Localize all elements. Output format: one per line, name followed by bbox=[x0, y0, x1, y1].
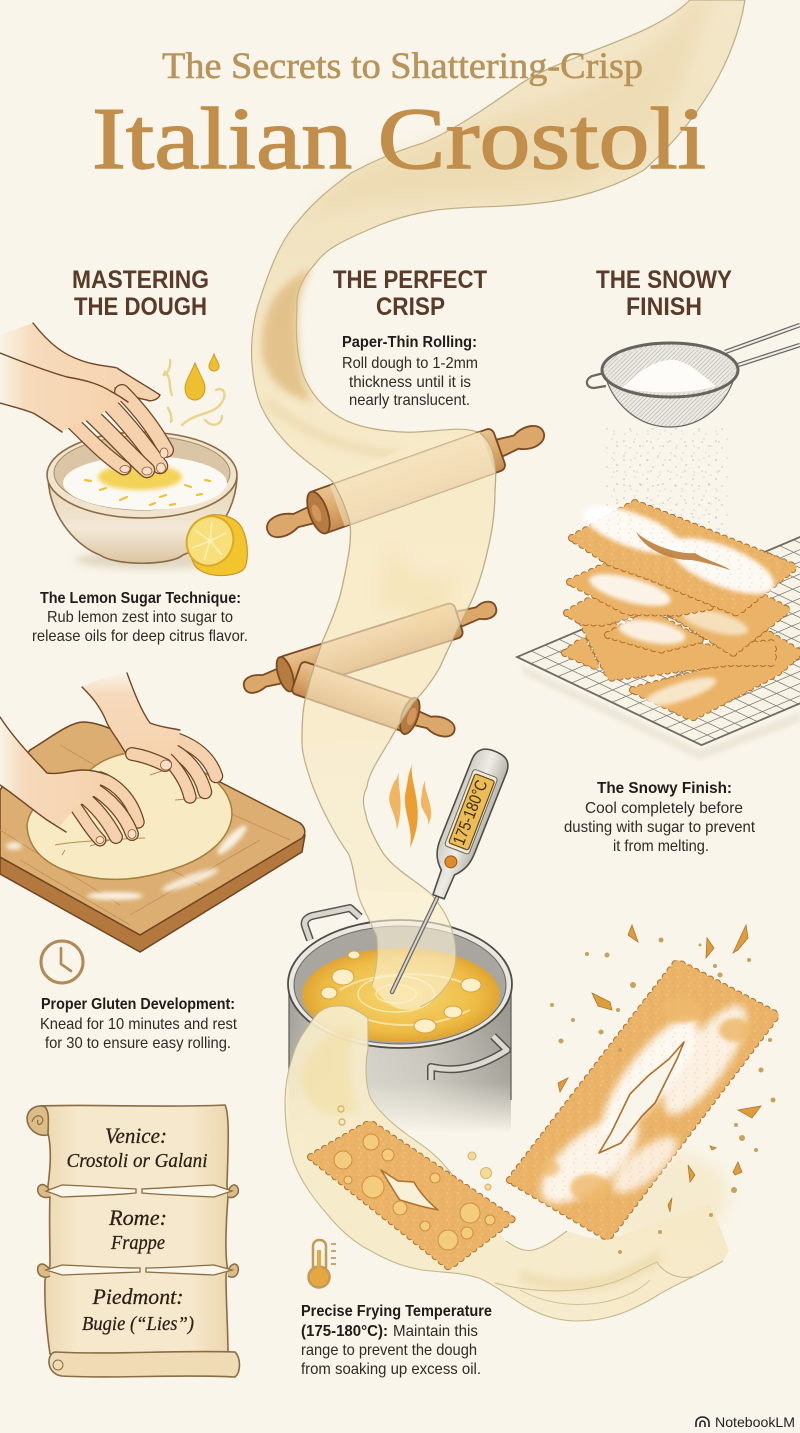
text: frying temperature: from soaking up excess oil. bbox=[301, 1361, 481, 1378]
text: gluten development: Proper Gluten Development: bbox=[41, 996, 235, 1013]
dough bbox=[27, 752, 232, 879]
text: gluten development bbox=[40, 996, 238, 1052]
sifted sugar falling bbox=[604, 428, 728, 548]
board top bbox=[0, 722, 305, 935]
handle bbox=[725, 325, 800, 366]
heading: mastering the dough bbox=[72, 266, 209, 321]
lemon oil drops and swirls bbox=[164, 354, 224, 425]
crumbs around crostolo bbox=[550, 925, 776, 1254]
scroll fold: upper bbox=[38, 1185, 238, 1198]
heading: the perfect crisp bbox=[333, 266, 487, 321]
hook bbox=[587, 373, 606, 388]
text: paper-thin rolling bbox=[342, 334, 478, 409]
text: snowy finish: The Snowy Finish: bbox=[597, 780, 732, 797]
crostolo with oil bubbles bbox=[311, 1123, 512, 1267]
rolling pin: lower back bbox=[239, 590, 501, 704]
heading: the perfect crisp: CRISP bbox=[376, 293, 445, 321]
sugar bbox=[63, 456, 227, 510]
heading: the snowy finish: THE SNOWY bbox=[596, 266, 732, 294]
text: frying temperature: Precise Frying Temperature bbox=[301, 1303, 492, 1320]
cooling rack bbox=[517, 528, 800, 745]
Rome label: Rome: bbox=[108, 1205, 167, 1230]
text: lemon sugar technique bbox=[32, 590, 248, 645]
probe bbox=[392, 898, 437, 992]
heading: the snowy finish bbox=[596, 266, 732, 321]
scroll fold: lower bbox=[38, 1264, 238, 1277]
text: lemon sugar technique: release oils for deep citrus flavor. bbox=[32, 628, 248, 645]
text: paper-thin rolling: Roll dough to 1-2mm bbox=[342, 355, 478, 372]
text: snowy finish: it from melting. bbox=[613, 838, 709, 855]
crostolo dusted with sugar bbox=[510, 962, 777, 1238]
hot oil bbox=[302, 948, 500, 1042]
bottom roll bbox=[49, 1352, 239, 1377]
lemon zest bbox=[85, 464, 210, 505]
bowl shadow bbox=[75, 551, 225, 569]
bowl bbox=[48, 478, 237, 563]
heading: the perfect crisp: THE PERFECT bbox=[333, 266, 487, 294]
text: gluten development: Knead for 10 minutes and rest bbox=[40, 1016, 238, 1033]
sugar mound bbox=[622, 360, 716, 392]
text: lemon sugar technique: The Lemon Sugar Technique: bbox=[40, 590, 241, 607]
heading: mastering the dough: MASTERING bbox=[72, 266, 209, 294]
icon: clock bbox=[41, 941, 83, 983]
flowing dough ribbon: upper bbox=[252, 0, 745, 990]
heat wisps bbox=[389, 764, 431, 848]
rolling pin: lower front bbox=[290, 659, 460, 749]
oil swirls and bubbles bbox=[321, 951, 481, 1033]
sieve bbox=[587, 325, 800, 427]
rim bbox=[602, 343, 738, 397]
rack shadow bbox=[520, 664, 800, 760]
temperature display: 175-180°C bbox=[449, 777, 491, 848]
crostolo bbox=[570, 565, 710, 613]
thermometer head bbox=[421, 744, 512, 904]
text: lemon sugar technique: Rub lemon zest into sugar to bbox=[47, 609, 233, 626]
text: paper-thin rolling: thickness until it is bbox=[349, 374, 471, 391]
top curl bbox=[27, 1106, 48, 1135]
Venice label: Venice: bbox=[105, 1123, 167, 1148]
fingers bbox=[70, 392, 168, 475]
title bbox=[92, 46, 706, 188]
icon: thermometer bbox=[308, 1240, 336, 1288]
hand: back bbox=[82, 673, 216, 797]
hand: front bbox=[0, 353, 128, 432]
translucent dough sheet over the rolling pins bbox=[302, 432, 496, 743]
text: frying temperature: Maintain this bbox=[393, 1323, 478, 1340]
panel: dough on board bbox=[0, 673, 305, 952]
pot bbox=[288, 908, 512, 1133]
rolling pin: upper bbox=[260, 412, 551, 551]
title: line two: Italian Crostoli bbox=[92, 91, 706, 188]
text: gluten development: for 30 to ensure easy rolling. bbox=[45, 1035, 231, 1052]
text: frying temperature bbox=[301, 1303, 492, 1378]
board side bbox=[0, 835, 305, 952]
title: line one: The Secrets to Shattering-Crisp bbox=[162, 46, 643, 87]
crostolo bbox=[633, 633, 800, 718]
text: frying temperature: range to prevent the dough bbox=[301, 1342, 477, 1359]
crostolo bbox=[608, 613, 700, 650]
heading: the snowy finish: FINISH bbox=[626, 293, 702, 321]
text: frying temperature: (175-180°C): bbox=[301, 1323, 388, 1340]
crostolo bbox=[582, 622, 773, 678]
crostolo bbox=[565, 640, 597, 667]
text: snowy finish: Cool completely before bbox=[585, 800, 743, 817]
scroll: regional names bbox=[27, 1105, 240, 1377]
text: paper-thin rolling: Paper-Thin Rolling: bbox=[342, 334, 477, 351]
NotebookLM badge: NotebookLM bbox=[715, 1414, 795, 1430]
heading: mastering the dough: THE DOUGH bbox=[74, 293, 207, 321]
crostolo bbox=[572, 496, 795, 613]
Piedmont label: Piedmont: bbox=[92, 1284, 184, 1309]
wood grain bbox=[0, 745, 290, 925]
flowing dough ribbon: lower bbox=[285, 1006, 730, 1321]
text: paper-thin rolling: nearly translucent. bbox=[349, 392, 470, 409]
panel: bowl and hands bbox=[0, 323, 247, 576]
hand: front bbox=[0, 717, 138, 844]
Rome name: Frappe bbox=[110, 1232, 165, 1254]
Piedmont name: Bugie (“Lies”) bbox=[82, 1313, 194, 1335]
crostolo bbox=[567, 600, 637, 623]
mesh bowl bbox=[606, 378, 734, 427]
crostolo bbox=[670, 597, 788, 653]
pot handle: right bbox=[431, 1036, 507, 1080]
stack of crostoli bbox=[565, 496, 800, 718]
flour dusting bbox=[6, 822, 250, 900]
scroll parchment bbox=[40, 1105, 228, 1354]
pot handle: left bbox=[305, 908, 360, 940]
text: snowy finish bbox=[564, 780, 756, 855]
thermometer bbox=[392, 744, 512, 992]
Venice names: Crostoli or Galani bbox=[66, 1150, 208, 1172]
lemon half bbox=[179, 509, 247, 576]
ribbon entering the oil bbox=[357, 890, 456, 1010]
hand: back bbox=[0, 323, 160, 401]
text: snowy finish: dusting with sugar to prevent bbox=[564, 819, 756, 836]
